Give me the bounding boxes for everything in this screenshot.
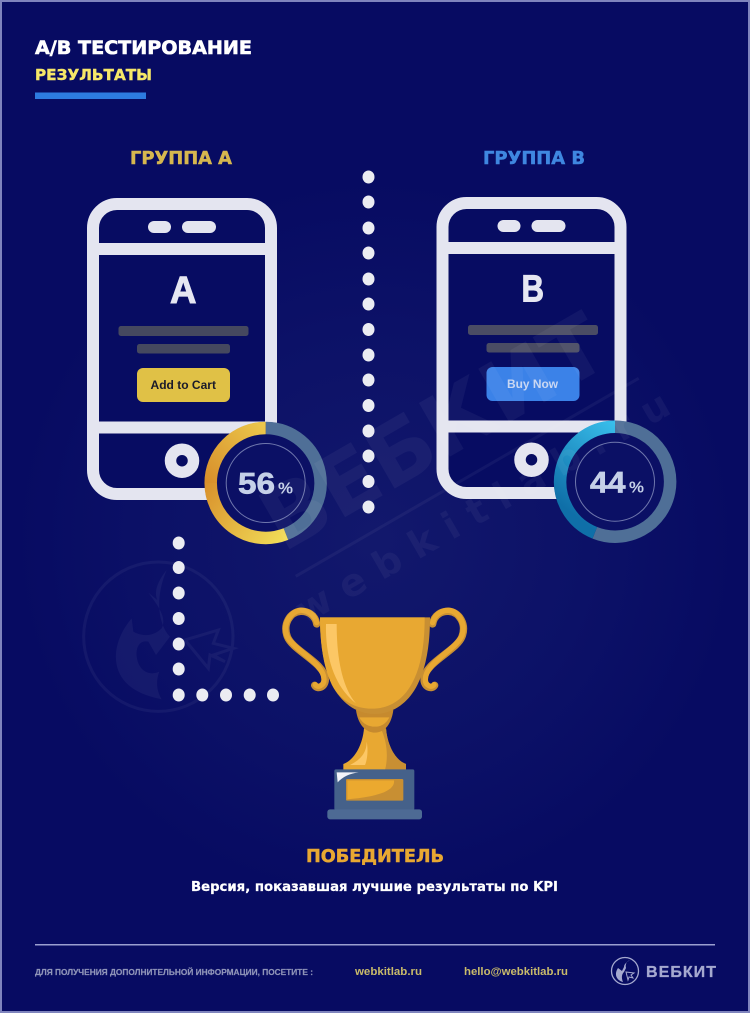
subtitle: РЕЗУЛЬТАТЫ [35,66,152,84]
winner description: Версия, показавшая лучшие результаты по KPI [191,879,558,895]
donut chart: 56%: % [278,480,293,498]
watermark: webkitlab.ru [288,382,678,633]
heading: winner: ПОБЕДИТЕЛЬ [306,846,444,867]
phone A [93,204,271,494]
heading: group A: ГРУППА А [130,148,232,169]
button: buy now [486,367,580,401]
text placeholder lines [468,325,598,352]
footer website: webkitlab.ru [354,966,422,978]
footer logo icon [612,958,638,984]
dotted connector to trophy [173,536,279,702]
donut chart: 56%: 56 [238,468,275,500]
donut chart: 56% [205,422,327,544]
dotted divider [362,170,374,514]
heading: group B: ГРУППА В [483,148,585,169]
button: add to cart [137,368,230,402]
footer note: ДЛЯ ПОЛУЧЕНИЯ ДОПОЛНИТЕЛЬНОЙ ИНФОРМАЦИИ, ПОСЕТИТЕ : [35,966,313,977]
donut chart: 44% [554,421,676,543]
text placeholder lines [118,326,248,354]
watermark: ВЕБКИТ [244,295,623,571]
footer divider [35,944,715,946]
donut chart: 44%: 44 [590,466,626,500]
watermark logo [84,562,233,711]
icon: trophy [286,610,463,819]
donut chart: 44%: % [629,480,644,496]
title underline [35,92,146,99]
variant letter B: B [522,268,544,310]
phone B [442,203,620,493]
title block [35,38,252,99]
variant letter A: A [170,270,196,312]
button: add to cart: Add to Cart [150,380,216,392]
button: buy now: Buy Now [507,379,558,391]
footer logo wordmark: ВЕБКИТ [646,964,716,981]
footer email: hello@webkitlab.ru [464,966,568,978]
title: А/В ТЕСТИРОВАНИЕ [35,38,252,59]
footer [35,944,716,984]
